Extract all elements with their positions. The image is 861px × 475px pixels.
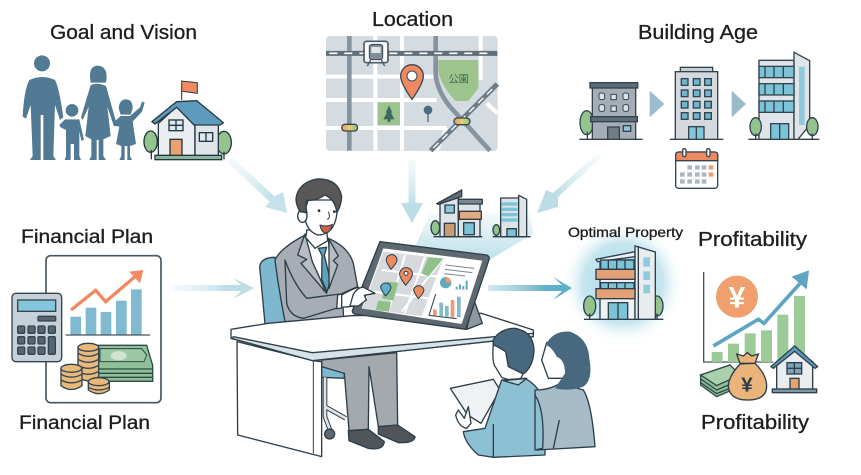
icon: new building [748,52,819,139]
icon: building age progression [579,52,819,188]
arrow: age step 2 [732,91,746,117]
heading: goal and vision: Goal and Vision [50,22,197,44]
heading: financial plan top: Financial Plan [21,227,153,248]
arrow: age step 1 [650,91,664,117]
icon: map pins [381,255,424,299]
optimal property glow [561,221,685,345]
heading: financial plan bottom: Financial Plan [19,413,150,434]
advisor pointing hand [350,287,375,306]
profit bars [712,296,805,362]
background fan behind houses [416,213,533,261]
arrow: profit growth [713,270,809,346]
consultation scene [231,179,545,457]
arrow: advisor to optimal property [488,277,572,300]
icon: location pin [401,65,423,99]
icon: money stack [701,365,740,397]
icon: small house [431,190,482,237]
client man [450,328,545,457]
client woman [535,331,595,450]
heading: profitability bottom: Profitability [701,412,809,434]
icon: yen coin: ¥ [729,281,746,314]
advisor chair back [260,257,286,324]
icon: old building [579,83,643,139]
label: park: 公園 [449,74,469,86]
label: optimal property: Optimal Property [568,224,683,240]
icon: family silhouette [23,55,145,160]
icon: profit house [771,346,818,393]
map: location [326,36,498,151]
icon: middle-aged building [670,67,723,139]
arrow: building age to advisor [537,153,602,213]
icon: yen bag: ¥ [741,373,753,396]
icon: small tree marker [424,106,432,122]
icon: cars [342,118,470,131]
arrow: growth line [71,270,143,310]
advisor [275,179,415,449]
icon: bills [97,345,153,381]
heading: profitability top: Profitability [698,229,807,251]
icon: tablet with map [352,242,489,329]
icon: calculator [12,293,62,362]
icon: calendar [676,149,718,188]
arrow: goal to advisor [228,157,287,213]
icon: train station [364,41,388,66]
chart: profitability [701,270,818,400]
arrow: location to advisor [401,160,423,223]
client tablet [450,379,500,423]
arrow: financial plan to advisor [172,278,254,299]
desk [231,313,533,457]
dashboard charts [429,265,474,319]
icon: small office [493,195,531,237]
icon: coins [61,343,109,394]
icon: optimal property building [584,246,663,319]
heading: location: Location [372,9,453,31]
bar chart [70,289,142,335]
icon: house with flag and trees [144,81,231,160]
panel: financial plan [12,256,161,403]
heading: building age: Building Age [638,22,758,44]
